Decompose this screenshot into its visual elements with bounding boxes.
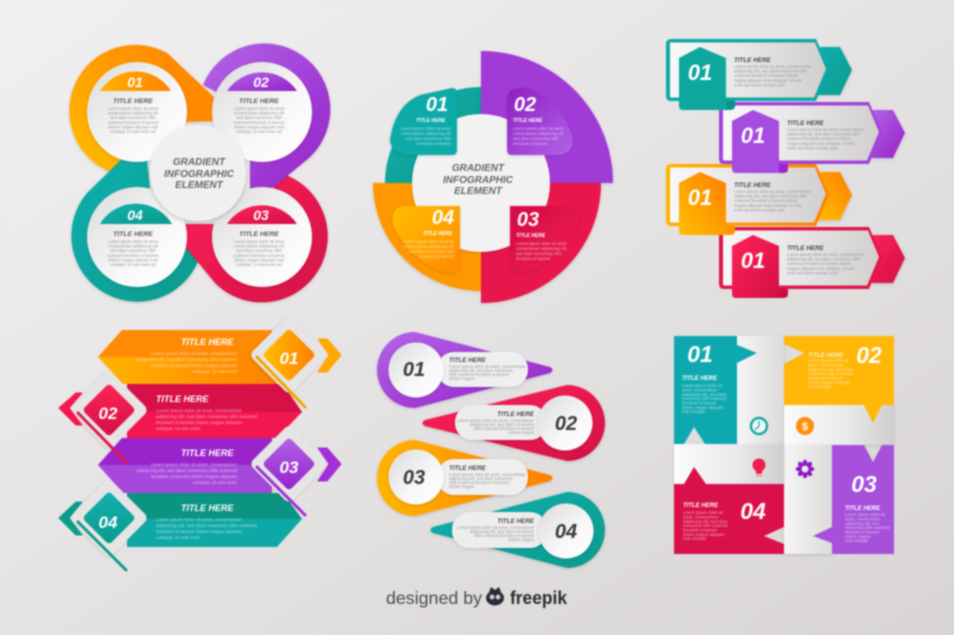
text block 04: volutpat. Ut wisi enim ad [110,262,156,267]
number 02: 02 [253,74,269,90]
icon: light bulb [752,458,766,476]
text block 02: TITLE HERE [513,118,543,124]
text block 01: euismod tincidunt ut laoreet [107,120,159,125]
text 02: nonummy nibh euismod [808,371,853,376]
text block 04 [107,231,159,267]
text block 02: sed diam nonummy nibh [513,136,559,141]
block 02 yellow [784,336,894,423]
grey tile bottom [784,445,832,554]
text 04: tincidunt ut laoreet dolore magna aliquam [156,529,242,534]
back arrow [870,110,905,158]
number 01: 01 [426,94,448,116]
sector teal [385,87,481,183]
text block 04: TITLE HERE [113,231,153,238]
text 03: Lorem ipsum dolor sit amet, consectetuer [449,472,526,477]
frame [719,102,882,164]
text 02: TITLE HERE [497,411,535,418]
number 04: 04 [555,521,577,543]
title: TITLE HERE [734,57,772,64]
tag [732,235,779,298]
text block 01: Lorem ipsum dolor sit amet [400,126,452,131]
text 03: amet, consectetuer [845,516,881,521]
text 02: tincidunt ut laoreet dolore magna aliquam [156,420,242,425]
body text: Lorem ipsum dolor sit amet, consectetuer [787,127,864,132]
number 03: 03 [517,209,539,231]
icon: freepik mascot [486,587,504,606]
text 03: TITLE HERE [181,448,234,458]
text 01: dolore magna aliquam [682,405,724,410]
text 04: dolore magna [508,537,535,542]
text 02: adipiscing elit, sed diam nonummy [470,422,535,427]
text 04 [156,503,257,540]
text block 01 [107,98,159,134]
text block 02 [233,98,285,134]
number: 01 [741,123,765,148]
pill 04 [452,512,547,548]
pointer: orange over purple [150,53,220,122]
text 02: nibh euismod tincidunt ut laoreet [474,426,535,431]
frame [666,164,829,226]
text block 01: TITLE HERE [416,118,446,124]
card 02 [507,88,573,155]
text 02: adipiscing elit, sed diam [808,367,853,372]
inner panel [723,106,879,160]
text 02: Lorem ipsum dolor sit amet, consectetuer [457,418,535,423]
text 03: adipiscing elit, sed [845,521,880,526]
tag [679,47,726,110]
text 04: amet, consectetuer [683,514,719,519]
text block 02: consectetuer adipiscing elit [513,131,564,136]
centre heading: INFOGRAPHIC [164,169,235,180]
ring: teal [71,152,201,302]
number 02: 02 [856,342,882,368]
number 03: 03 [403,467,425,489]
text 02: TITLE HERE [156,394,209,404]
body text: adipiscing elit, sed diam nonummy nibh [734,194,808,199]
text 02: dolore magna [508,430,535,435]
sector purple [481,51,613,183]
text block 04: dolore magna aliquam erat [108,257,159,262]
text 03: Lorem ipsum dolor sit [845,512,886,517]
text 03: TITLE HERE [449,465,487,472]
inner panel [670,168,826,222]
tag fold [726,226,735,235]
body text: adipiscing elit, sed diam nonummy nibh [787,257,861,262]
text block 02: Lorem ipsum dolor sit amet [234,106,285,111]
back arrow [870,235,905,283]
number 04: 04 [432,207,454,229]
disc 03 [212,187,312,287]
text block 02: euismod tincidunt ut laoreet [233,120,285,125]
text block 04: tincidunt ut laoreet [420,254,455,259]
header 02 [227,72,297,91]
body text: euismod tincidunt ut laoreet dolore [734,73,799,78]
text 03: TITLE HERE [845,506,881,512]
text block 01 [400,118,452,146]
body text: magna aliquam erat volutpat. Ut wisi [787,141,855,146]
banner 4 red [719,227,905,298]
disc 01 [87,62,187,162]
text 03: nonummy nibh euismod [845,525,890,530]
text block 04: sed diam nonummy nibh [408,249,455,254]
sector red [481,183,601,303]
icon: gear [796,460,814,478]
text 04: dolore magna aliquam [683,532,725,537]
header 04 [100,204,172,224]
centre disc [150,125,246,221]
grey tile top [737,336,784,444]
back arrow [817,172,852,220]
text 01: amet, consectetuer [682,387,718,392]
text 02: erat volutpat [808,384,832,389]
text 03: adipiscing elit, sed diam nonummy [449,476,514,481]
body text: enim ad minim veniam quis [734,207,785,212]
pill 02 [455,405,547,440]
disc 04 [87,187,187,287]
number 02: 02 [514,94,536,116]
body text: adipiscing elit, sed diam nonummy nibh [787,132,861,137]
number: 01 [688,185,712,210]
centre heading: INFOGRAPHIC [443,175,514,186]
header 01 [100,71,171,91]
inner panel [723,230,879,286]
text 02: volutpat. Ut wisi enim [156,426,200,431]
badge 03: 03 [280,458,299,477]
text block 02 [513,118,564,146]
text block 03: sed diam nonummy nibh [236,248,282,253]
badge 04 [59,478,149,570]
text 04: adipiscing elit, sed diam [683,519,728,524]
disc 02 [212,62,312,162]
frame [666,39,829,101]
centre heading: ELEMENT [175,180,224,191]
text block 02: volutpat. Ut wisi enim ad [236,129,282,134]
text block 03: consectetuer adipiscing elit [234,244,285,249]
text 01: nibh euismod tincidunt ut laoreet [449,372,510,377]
number 04: 04 [127,207,143,223]
tag fold [779,164,788,173]
ribbon purple [98,438,272,493]
text 03: dolore magna [845,534,871,539]
text 02: Lorem ipsum dolor sit [808,358,849,363]
text block 03: dolore magna aliquam erat [234,257,285,262]
centre heading: GRADIENT [173,157,226,168]
text 01 [449,357,526,381]
text block 04 [403,231,455,259]
text block 04: Lorem ipsum dolor sit amet [403,239,455,244]
text 01: tincidunt ut laoreet dolore magna aliquam [151,363,237,368]
text 02 [808,353,853,389]
text 01: tincidunt ut laoreet [682,401,717,406]
text 04: volutpat. Ut wisi enim [156,535,200,540]
centre disc [412,114,550,252]
circle 04 [538,504,594,558]
text block 03: Lorem ipsum dolor sit amet [234,239,285,244]
text block 04: TITLE HERE [423,231,453,237]
ribbon orange [98,330,277,384]
panel: teardrop pills [377,332,605,568]
body text: euismod tincidunt ut laoreet dolore [787,261,852,266]
text 02 [457,411,535,435]
frame [719,227,882,289]
text 04: TITLE HERE [181,503,234,513]
badge 04: 04 [99,513,118,532]
body text: Lorem ipsum dolor sit amet, consectetuer [734,64,811,69]
credit text: designed by [386,588,482,608]
text 03: nibh euismod tincidunt ut laoreet [449,480,510,485]
text block 03: TITLE HERE [516,233,546,239]
text 02: Lorem ipsum dolor sit amet, consectetuer [156,408,242,413]
text 01: volutpat. Ut wisi enim [193,369,237,374]
card 04 [392,206,460,273]
tag fold [779,289,788,298]
text block 02: Lorem ipsum dolor sit amet [513,126,564,131]
badge 02 [59,370,149,462]
text block 01: sed diam nonummy nibh [110,115,156,120]
circle 02 [538,396,592,450]
text 04: nibh euismod tincidunt ut laoreet [474,533,535,538]
text 04: TITLE HERE [497,518,535,525]
brand name: freepik [510,588,568,608]
body text: adipiscing elit, sed diam nonummy nibh [734,69,808,74]
ring: red [180,173,328,302]
card 03 [510,206,579,273]
header 03 [227,205,297,224]
body text: magna aliquam erat volutpat. Ut wisi [787,266,855,271]
text 01: Lorem ipsum dolor sit amet, consectetuer [449,364,526,369]
inner panel [670,42,826,98]
banner 1 teal [666,39,852,110]
text block 02: TITLE HERE [239,98,279,105]
tag [732,110,779,173]
text 01: dolore magna [449,376,475,381]
title: TITLE HERE [734,182,772,189]
text 02: TITLE HERE [808,353,844,359]
circle 01 [388,342,444,398]
text 03: erat volutpat [845,538,869,543]
text 04: Lorem ipsum dolor sit amet, consectetuer [156,517,242,522]
pill 03 [437,459,528,495]
centre heading: GRADIENT [452,163,505,174]
text block 04: euismod tincidunt ut laoreet [107,253,159,258]
badge 02: 02 [99,404,118,423]
text block 01: volutpat. Ut wisi enim ad [110,129,156,134]
ring: orange base [69,45,220,173]
text block 03: sed diam nonummy nibh [516,251,562,256]
ribbon teal [127,493,302,547]
text 02: dolore magna aliquam [808,380,850,385]
text 04: nonummy nibh euismod [683,523,728,528]
text 02: tincidunt ut laoreet [808,376,843,381]
body text: enim ad minim veniam quis [787,270,838,275]
text block 03: euismod tincidunt ut laoreet [233,253,285,258]
text 04: Lorem ipsum dolor sit amet, consectetuer [457,525,535,530]
text block 03: TITLE HERE [239,231,279,238]
drop purple [377,332,552,408]
card 01 [390,88,457,155]
body text: euismod tincidunt ut laoreet dolore [734,198,799,203]
text 01: Lorem ipsum dolor sit [682,383,723,388]
icon: dollar coin: $ [802,421,808,433]
drop red [422,385,605,461]
text block 04: Lorem ipsum dolor sit amet [108,239,159,244]
text block 01: consectetuer adipiscing elit [108,111,159,116]
text 03: tincidunt ut laoreet [845,530,880,535]
banner 2 purple [719,102,905,173]
number 01: 01 [687,341,713,367]
text block 03: Lorem ipsum dolor sit amet [516,241,567,246]
text 04: erat volutpat [683,536,707,541]
number 04: 04 [740,498,766,524]
text block 04: sed diam nonummy nibh [110,248,156,253]
centre heading: ELEMENT [454,186,503,197]
text 04: tincidunt ut laoreet [683,528,718,533]
text block 01: TITLE HERE [113,98,153,105]
ring: purple [203,43,330,193]
text 03: tincidunt ut laoreet dolore magna aliquam [151,474,237,479]
sector orange [373,183,481,291]
text 01: erat volutpat [682,409,706,414]
text block 03: consectetuer adipiscing elit [516,246,567,251]
back arrow [817,47,852,95]
text 04: Lorem ipsum dolor sit [683,510,724,515]
number 03: 03 [851,471,877,497]
number: 01 [688,60,712,85]
text block 04: consectetuer adipiscing elit [404,244,455,249]
panel: quadrant wheel [373,51,613,303]
text 03 [845,506,890,543]
badge 01: 01 [280,349,298,368]
panel: diamond ribbons [59,315,341,570]
text 03 [136,448,237,485]
text 04: adipiscing elit, sed diam nonummy [470,529,535,534]
text 01: TITLE HERE [682,376,718,382]
text 01: TITLE HERE [449,357,487,364]
text 03 [449,465,526,489]
text 03: dolore magna [449,484,475,489]
text block 03: tincidunt ut laoreet [516,256,551,261]
text 04: TITLE HERE [683,503,719,509]
panel: four ring pins [69,43,330,302]
title: TITLE HERE [787,245,825,252]
body text: euismod tincidunt ut laoreet dolore [787,136,852,141]
text 03: Lorem ipsum dolor sit amet, consectetuer [151,462,237,467]
number 03: 03 [253,207,269,223]
text block 02: consectetuer adipiscing elit [234,111,285,116]
text 04: adipiscing elit, sed diam nonummy nibh euismod [156,523,257,528]
text 01 [136,337,237,374]
banner 3 orange [666,164,852,235]
body text: Lorem ipsum dolor sit amet, consectetuer [734,189,811,194]
panel: pinwheel blocks [674,336,894,554]
title: TITLE HERE [787,120,825,127]
text 04 [683,503,728,541]
text 02 [156,394,257,431]
text block 01: tincidunt ut laoreet [417,141,452,146]
text 01: TITLE HERE [181,337,234,347]
number 02: 02 [555,413,577,435]
text block 03 [233,231,285,267]
text block 01: sed diam nonummy nibh [405,136,452,141]
text 01 [682,376,727,414]
grey tile left [674,444,784,484]
text 04 [457,518,535,542]
badge 03 [249,424,341,515]
text 01: adipiscing elit, sed diam nonummy nibh euismod [136,357,237,362]
text block 01: Lorem ipsum dolor sit amet [108,106,159,111]
text block 02: sed diam nonummy nibh [236,115,282,120]
text block 03: volutpat. Ut wisi enim ad [236,262,282,267]
circle 03 [388,450,444,504]
block 03 purple [813,445,894,554]
block 01 teal [674,336,757,444]
panel: arrow banners [666,39,905,298]
block 04 red [674,467,784,554]
text 03: adipiscing elit, sed diam nonummy nibh euismod [136,468,237,473]
grey tile right [784,405,894,445]
pill 01 [437,352,528,387]
text 02: amet, consectetuer [808,362,844,367]
body text: Lorem ipsum dolor sit amet, consectetuer [787,252,864,257]
drop teal [430,492,605,568]
text block 01: consectetuer adipiscing elit [401,131,452,136]
text block 02: tincidunt ut laoreet [513,141,548,146]
text block 03 [516,233,567,261]
icon: clock [751,418,767,434]
footer: designed by freepik [386,587,568,608]
drop orange [377,440,552,516]
text 01: adipiscing elit, sed diam nonummy [449,368,514,373]
text 01: adipiscing elit, sed diam [682,392,727,397]
ribbon red [127,384,302,438]
tag [679,172,726,235]
text 02: adipiscing elit, sed diam nonummy nibh euismod [156,414,257,419]
text block 01: dolore magna aliquam erat [108,124,159,129]
text 01: Lorem ipsum dolor sit amet, consectetuer [151,351,237,356]
text block 02: dolore magna aliquam erat [234,124,285,129]
text 03: volutpat. Ut wisi enim [193,480,237,485]
number 01: 01 [403,359,425,381]
body text: enim ad minim veniam quis [734,82,785,87]
text block 04: consectetuer adipiscing elit [108,244,159,249]
text 01: nonummy nibh euismod [682,396,727,401]
tag fold [726,101,735,110]
number 01: 01 [127,74,143,90]
badge 01 [249,315,341,407]
body text: enim ad minim veniam quis [787,145,838,150]
number: 01 [741,248,765,273]
icon: dollar coin [796,417,814,435]
body text: magna aliquam erat volutpat. Ut wisi [734,78,802,83]
body text: magna aliquam erat volutpat. Ut wisi [734,203,802,208]
